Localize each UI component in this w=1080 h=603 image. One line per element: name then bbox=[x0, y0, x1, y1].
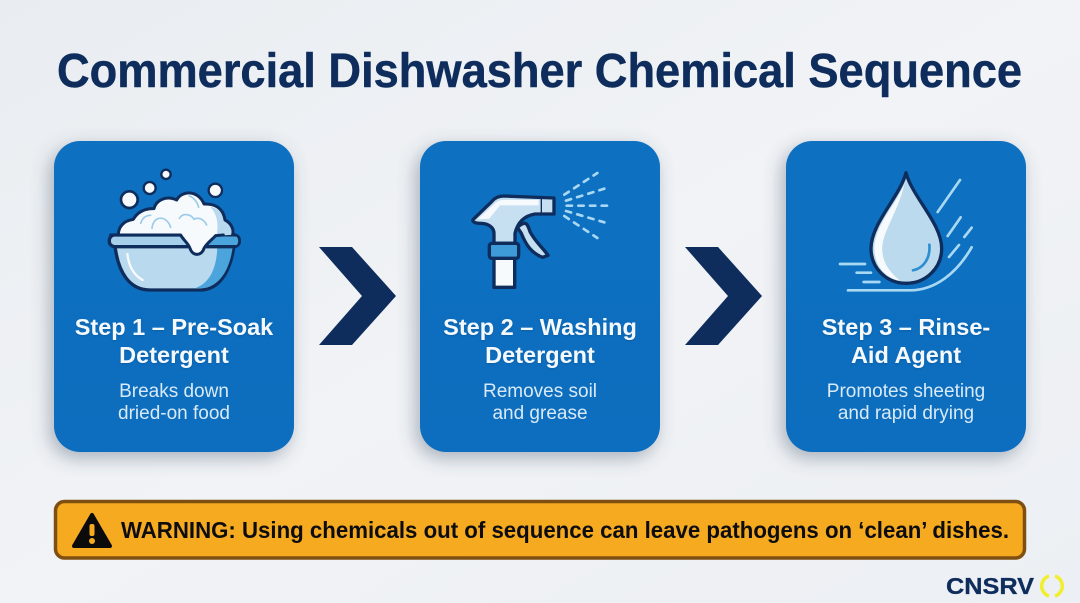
step 1 heading: Step 1 – Pre-Soak bbox=[75, 314, 274, 340]
step 2 heading: Detergent bbox=[485, 342, 595, 368]
panel: step 3 bbox=[786, 141, 1026, 452]
step 3 description: and rapid drying bbox=[838, 403, 974, 424]
step 1 heading: Detergent bbox=[119, 342, 229, 368]
panel: step 2 bbox=[420, 141, 660, 452]
arrow: step 2 to step 3 bbox=[685, 247, 762, 345]
step 2 heading: Step 2 – Washing bbox=[443, 314, 637, 340]
icon: logo ring bbox=[1042, 576, 1062, 596]
step 3 description: Promotes sheeting bbox=[827, 381, 985, 402]
icon: water drop bbox=[840, 173, 972, 290]
arrow: step 1 to step 2 bbox=[319, 247, 396, 345]
title: Commercial Dishwasher Chemical Sequence bbox=[57, 45, 1022, 98]
icon: spray bottle bbox=[473, 173, 607, 287]
step 1 description: Breaks down bbox=[119, 381, 229, 402]
panel: step 1 bbox=[54, 141, 294, 452]
warning banner bbox=[56, 502, 1024, 558]
step 3 heading: Step 3 – Rinse- bbox=[822, 314, 990, 340]
warning text: WARNING: Using chemicals out of sequence can leave pathogens on ‘clean’ dishes. bbox=[121, 517, 1009, 543]
logo: CNSRV: CNSRV bbox=[946, 573, 1035, 599]
step 1 description: dried-on food bbox=[118, 403, 230, 424]
step 2 description: and grease bbox=[492, 403, 588, 424]
step 2 description: Removes soil bbox=[483, 381, 597, 402]
icon: wash basin with foam bbox=[109, 170, 239, 290]
step 3 heading: Aid Agent bbox=[851, 342, 961, 368]
icon: warning triangle bbox=[74, 515, 110, 546]
logo: CNSRV bbox=[946, 573, 1062, 599]
